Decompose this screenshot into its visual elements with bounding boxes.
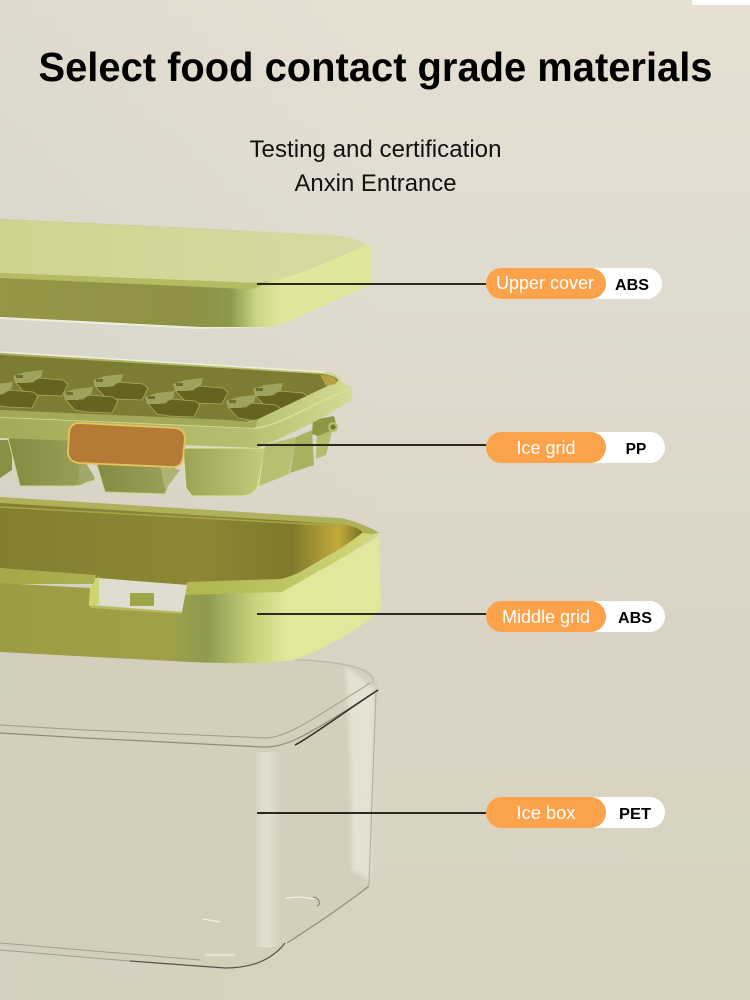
interior bbox=[0, 498, 364, 585]
callout: upper cover: Upper cover bbox=[496, 273, 594, 293]
callout: upper cover: ABS bbox=[615, 277, 649, 294]
callout: ice grid bbox=[257, 432, 665, 463]
cubes bbox=[0, 440, 12, 478]
tray interior bbox=[0, 355, 338, 422]
rim bbox=[0, 533, 379, 595]
front and side faces bbox=[0, 537, 381, 663]
ice grid bbox=[0, 352, 352, 496]
callout: middle grid: ABS bbox=[618, 610, 652, 627]
callout: ice box: PET bbox=[619, 806, 652, 823]
ice box (transparent) bbox=[0, 652, 379, 968]
cells bbox=[0, 370, 308, 421]
middle grid bbox=[0, 497, 381, 663]
rim bbox=[0, 353, 352, 448]
title: Select food contact grade materials bbox=[38, 44, 712, 90]
callout: ice grid: PP bbox=[626, 441, 646, 458]
callout: upper cover bbox=[257, 268, 662, 299]
subtitle: Anxin Entrance bbox=[294, 170, 456, 197]
subtitle bbox=[250, 136, 502, 197]
callout: middle grid bbox=[257, 601, 665, 632]
upper cover bbox=[0, 219, 372, 329]
callout: ice grid: Ice grid bbox=[516, 438, 576, 458]
callout: middle grid: Middle grid bbox=[502, 607, 590, 627]
callout: ice box bbox=[257, 797, 665, 828]
subtitle: Testing and certification bbox=[250, 136, 502, 163]
notch tab bbox=[90, 578, 187, 612]
orange tab bbox=[68, 423, 185, 467]
side post bbox=[312, 416, 337, 436]
callout: ice box: Ice box bbox=[516, 803, 576, 823]
